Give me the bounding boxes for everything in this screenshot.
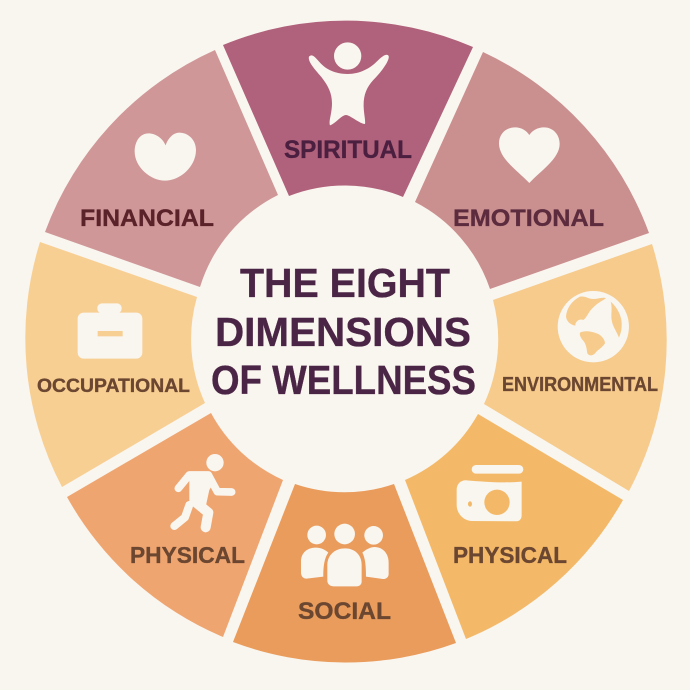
label: occupational: OCCUPATIONAL: [37, 376, 190, 397]
label: financial: FINANCIAL: [80, 205, 214, 232]
label: environmental: ENVIRONMENTAL: [502, 374, 658, 396]
title: DIMENSIONS: [215, 309, 471, 355]
icon: heart: [135, 133, 196, 181]
icon: heart: [499, 127, 560, 183]
icon: briefcase: [78, 303, 142, 359]
panel: emotional: [415, 52, 649, 289]
label: physical: PHYSICAL: [130, 542, 245, 568]
label: physical: PHYSICAL: [453, 542, 567, 568]
title: THE EIGHT: [240, 260, 450, 306]
label: social: SOCIAL: [298, 598, 391, 625]
panel: social: [233, 484, 456, 662]
panel: financial: [45, 50, 278, 287]
panel: physical (right): [405, 414, 623, 639]
icon: globe: [558, 291, 629, 362]
panel: spiritual: [223, 21, 473, 197]
title: OF WELLNESS: [211, 357, 476, 403]
panel: physical (left): [67, 413, 283, 637]
label: spiritual: SPIRITUAL: [284, 136, 412, 164]
title: [211, 260, 476, 403]
icon: camera-like device: [457, 465, 523, 521]
icon: group of people: [301, 524, 389, 586]
icon: running person: [174, 454, 232, 527]
panel: occupational: [25, 242, 205, 487]
panel: environmental: [484, 244, 667, 491]
icon: raised arms figure: [309, 42, 389, 125]
label: emotional: EMOTIONAL: [453, 205, 604, 232]
